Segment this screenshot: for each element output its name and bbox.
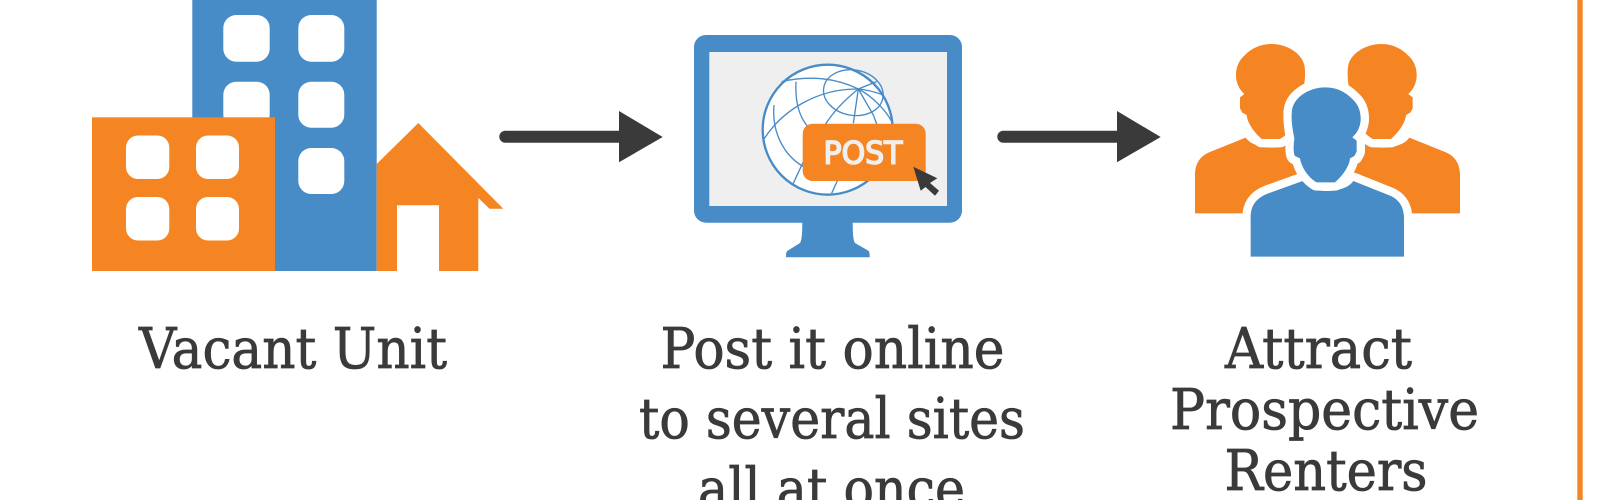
tall blue building [192,0,377,271]
panel: vacant unit [92,0,503,382]
post button [803,124,926,181]
orange building [92,117,275,271]
person: blue front [1251,87,1404,257]
orange vertical divider [1577,0,1583,500]
monitor stand [786,220,870,257]
label: post it online: Post it online [660,317,1004,382]
icon: group of people [1195,44,1460,257]
label: post it online [639,317,1025,500]
label: post it online: to several sites [639,387,1025,452]
label: vacant unit: Vacant Unit [138,317,447,382]
icon: buildings and house [92,0,503,271]
person: orange left [1195,44,1348,213]
post button: POST [824,136,904,172]
label: attract prospective renters [1170,317,1479,500]
orange house [377,123,503,271]
panel: attract renters [1170,44,1479,500]
icon: cursor [913,167,939,196]
panel: post online [639,35,1025,500]
label: attract prospective renters: Prospective [1170,378,1479,443]
arrow: vacant unit to post online [499,111,663,162]
globe [763,65,893,195]
arrow: post online to renters [997,111,1161,162]
person: orange right [1307,44,1460,213]
icon: monitor with globe and post button [694,35,962,257]
monitor frame and screen [694,35,962,223]
label: attract prospective renters: Attract [1224,317,1412,382]
